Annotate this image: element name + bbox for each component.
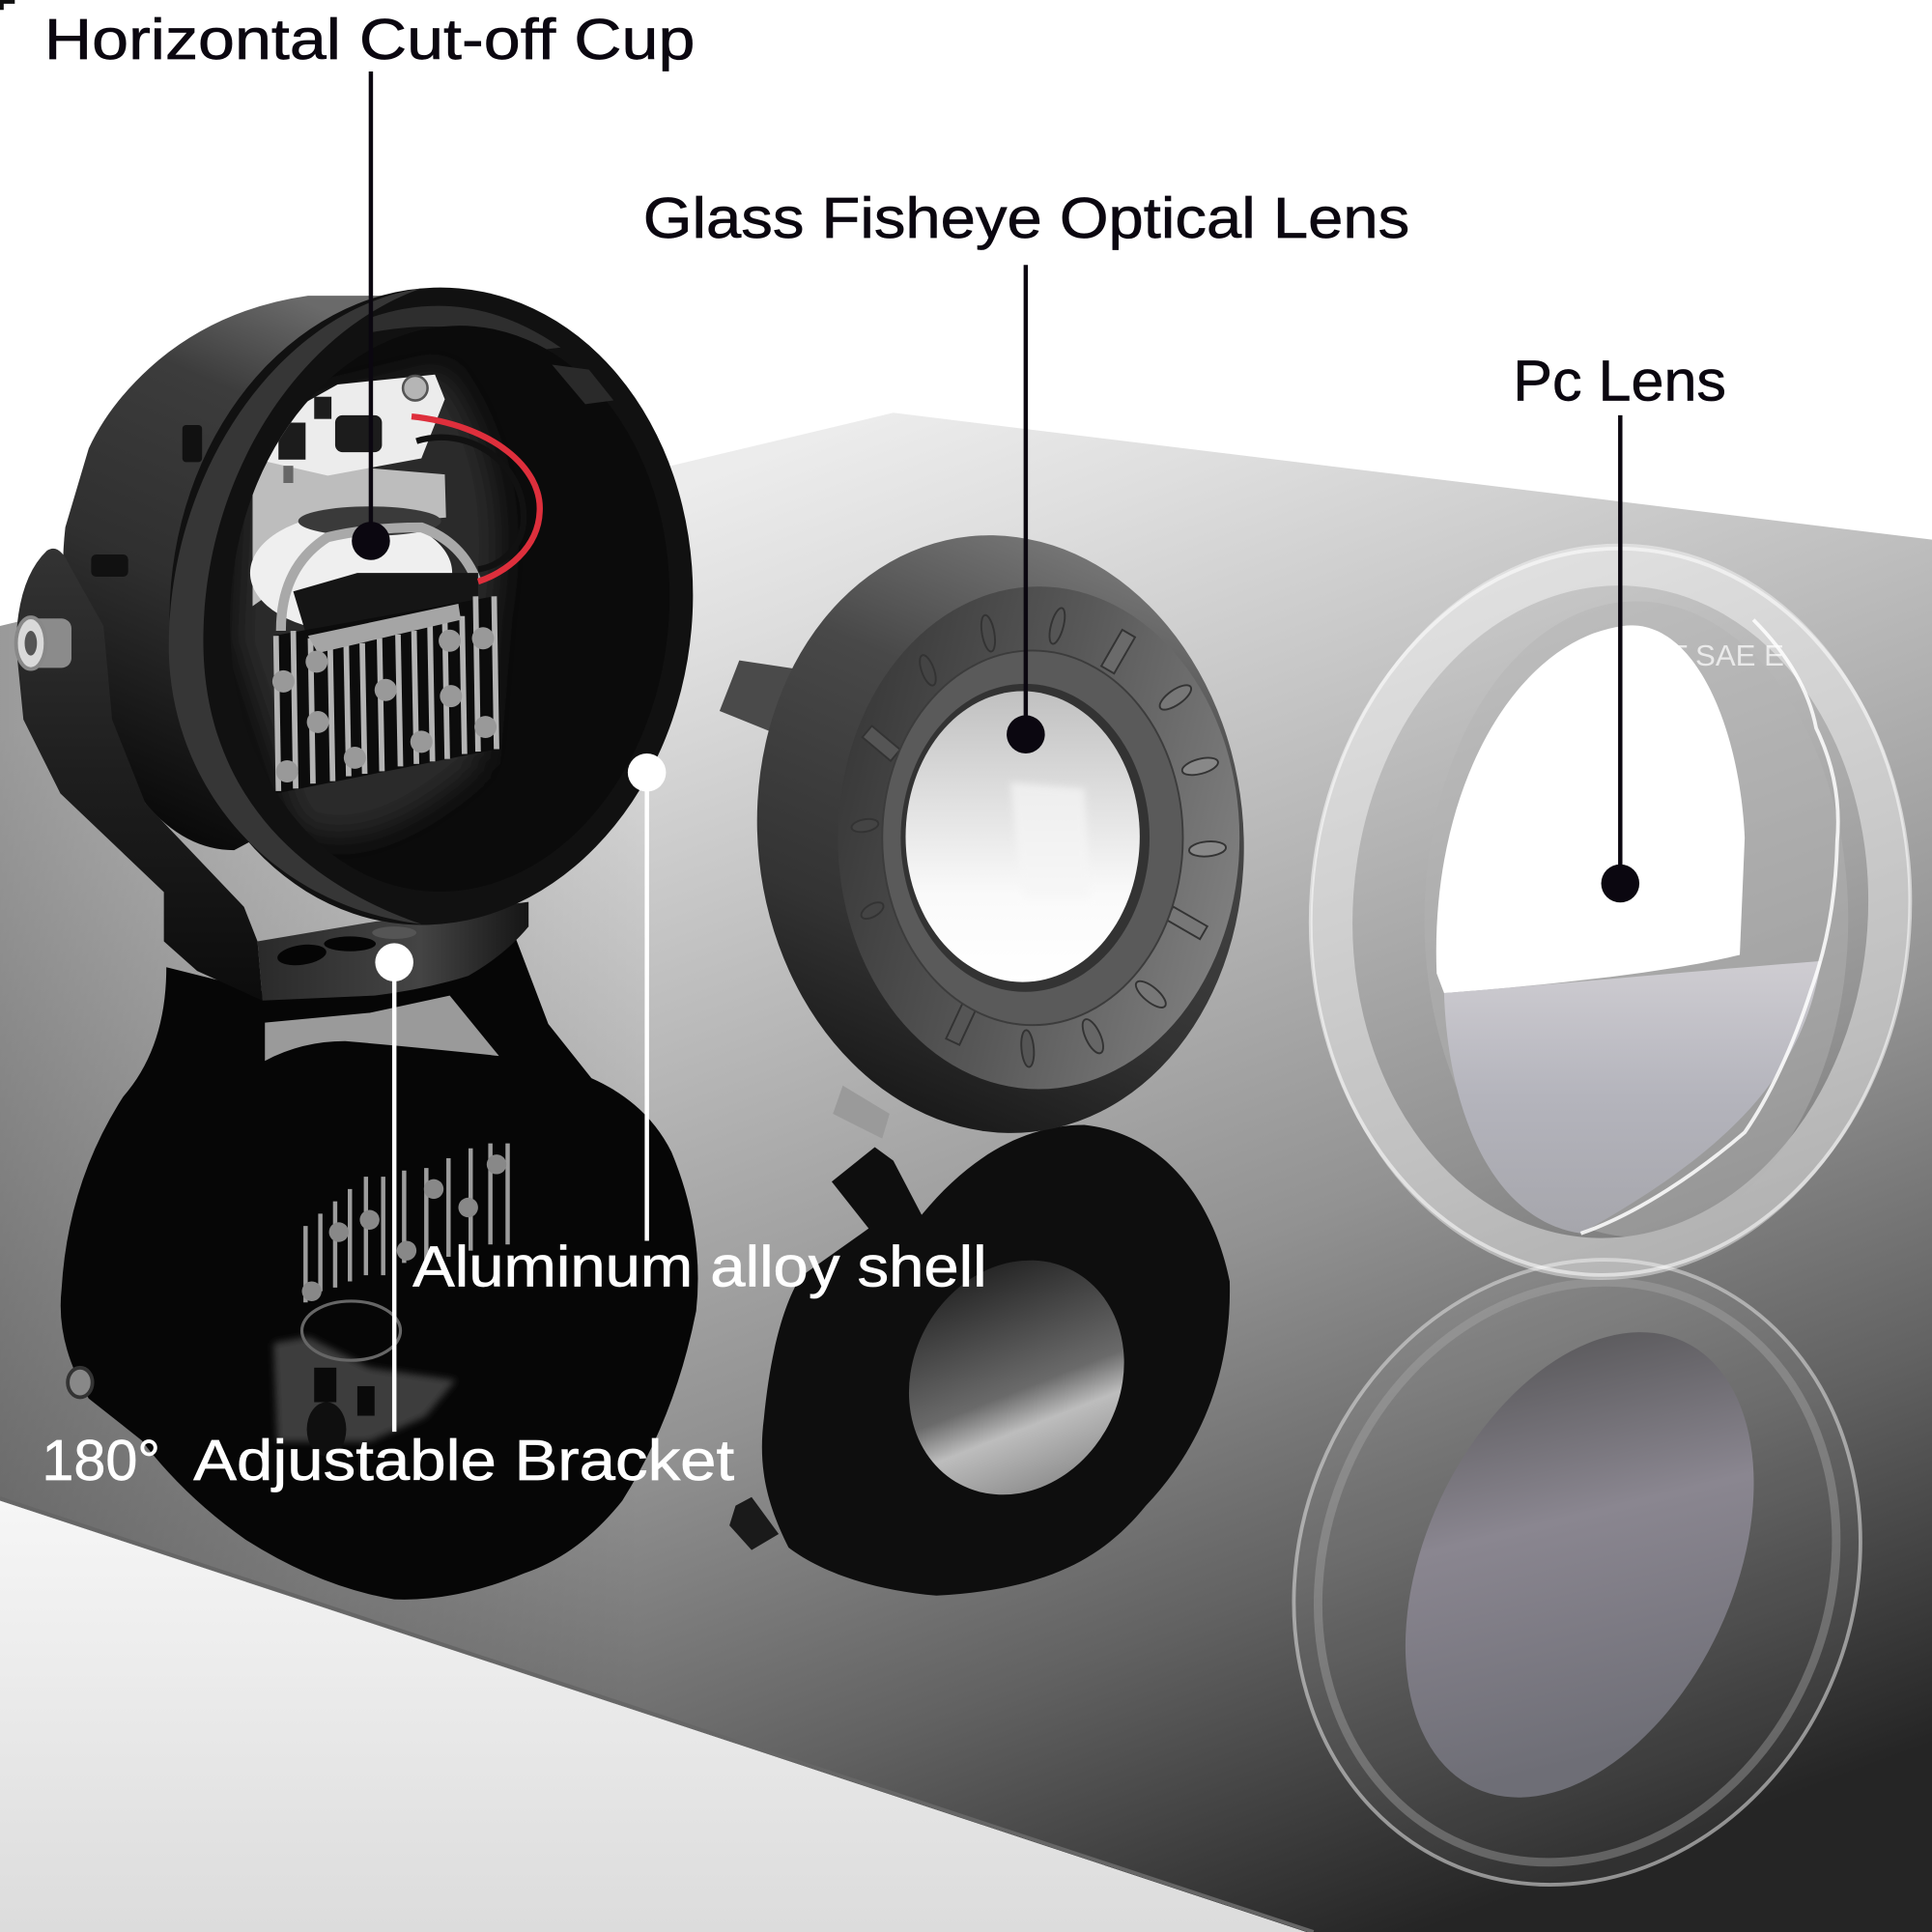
outer rim (1308, 546, 1913, 1278)
callout: Pc Lens (1513, 349, 1726, 902)
textured top band (370, 306, 560, 352)
lamp assembly (16, 266, 720, 1001)
lamp reflection (61, 936, 698, 1600)
callout: 180° Adjustable Bracket: Adjustable Bracket (193, 1428, 735, 1492)
white cup (249, 523, 452, 625)
inner ridge (882, 650, 1182, 1025)
lens highlight (1010, 782, 1085, 838)
wires (415, 435, 502, 572)
body ridges (91, 425, 202, 577)
lens reflection (729, 1125, 1230, 1596)
callout: Horizontal Cut-off Cup: Horizontal Cut-off Cup (44, 7, 695, 71)
callout: Glass Fisheye Optical Lens (643, 185, 1409, 753)
bright inner arc (1580, 620, 1838, 1234)
adjustable bracket arm (16, 549, 263, 1001)
callout: Glass Fisheye Optical Lens: Glass Fisheye Optical Lens (643, 185, 1409, 250)
callout: Horizontal Cut-off Cup (44, 7, 695, 560)
front face (838, 586, 1239, 1090)
PC lens unit (1287, 528, 1932, 1295)
gray reflector (252, 458, 446, 607)
cavity contents (234, 370, 540, 836)
reflected dome (1336, 1276, 1824, 1853)
approval marking: DOT SAE E (1624, 639, 1784, 672)
reflected lens glass (868, 1222, 1165, 1533)
table gap under base (265, 996, 499, 1061)
bolt (16, 617, 71, 669)
callout: Aluminum alloy shell (412, 753, 987, 1299)
callout: Pc Lens: Pc Lens (1513, 349, 1726, 413)
PC lens reflection (1201, 1174, 1932, 1932)
glass fisheye lens unit (720, 535, 1244, 1138)
outer housing (727, 511, 1273, 1157)
reflected bolt (68, 1368, 93, 1397)
inner ring detail (552, 365, 613, 404)
inner chamber (1424, 601, 1848, 1237)
glossy table surface (0, 412, 1932, 1932)
callout: 180° Adjustable Bracket (42, 943, 735, 1492)
cup frame (281, 527, 477, 631)
reflected circuit board (273, 1301, 456, 1457)
screw (403, 376, 428, 401)
white floor with table edge (0, 1498, 1314, 1932)
clips (720, 661, 797, 732)
dome highlight (1436, 625, 1745, 993)
black holder (294, 573, 478, 630)
callout: Aluminum alloy shell: Aluminum alloy shell (412, 1235, 987, 1299)
reflected pads (301, 1154, 506, 1301)
front ring (143, 266, 720, 947)
reflected heat sink (305, 1144, 508, 1302)
circuit board (252, 375, 444, 475)
glass lens (906, 692, 1140, 982)
mounting base (258, 902, 528, 1001)
reflected tab (729, 1497, 779, 1550)
inner cavity (207, 307, 693, 910)
heat sink (272, 596, 497, 793)
lamp rear body (63, 296, 443, 850)
board components (278, 397, 382, 483)
callout: 180° Adjustable Bracket: 180° (42, 1428, 160, 1492)
notches (850, 607, 1227, 1067)
dome lower part (1444, 961, 1821, 1234)
interior shading (234, 370, 499, 836)
corner mark (2, 2, 14, 10)
mounting slots (276, 926, 416, 968)
